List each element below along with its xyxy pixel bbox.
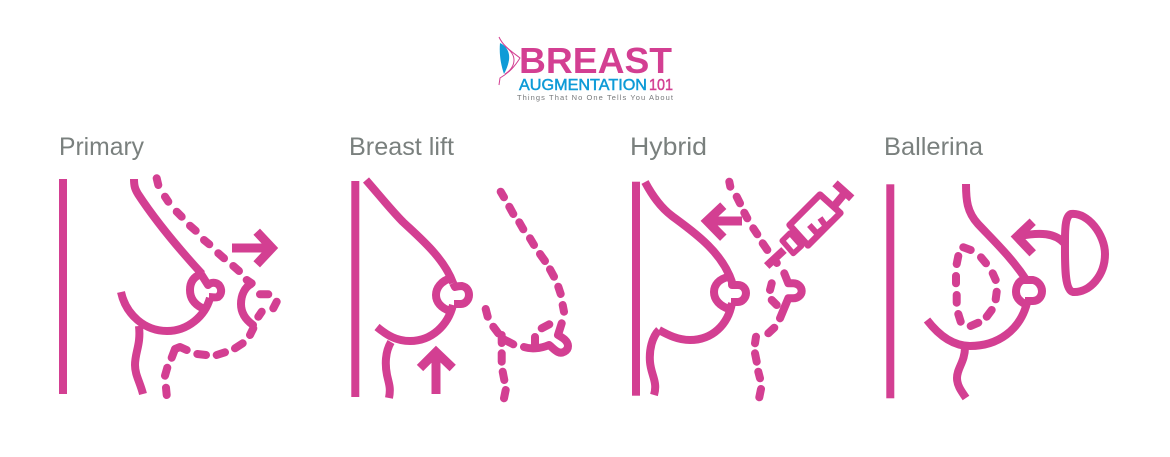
logo word: AUGMENTATION: AUGMENTATION xyxy=(519,77,647,94)
icon: implant xyxy=(1065,214,1105,292)
icon: syringe xyxy=(767,183,852,266)
panel: Breast lift xyxy=(349,133,568,398)
heading: Ballerina: Ballerina xyxy=(884,133,983,161)
body wall bar xyxy=(632,182,640,396)
logo word: BREAST: BREAST xyxy=(519,40,672,81)
solid breast outline xyxy=(366,180,469,398)
panel: Hybrid xyxy=(630,133,852,397)
arrow: right xyxy=(232,232,272,264)
dashed outline xyxy=(729,182,802,397)
heading: Hybrid: Hybrid xyxy=(630,133,707,161)
logo xyxy=(499,37,674,102)
arrow: left xyxy=(707,206,742,238)
logo tagline: Things That No One Tells You About xyxy=(517,93,674,102)
logo icon xyxy=(499,37,520,85)
heading: Breast lift: Breast lift xyxy=(349,133,454,161)
panel: Primary xyxy=(59,133,277,395)
solid breast outline xyxy=(645,182,746,395)
dashed original outline xyxy=(486,192,568,398)
solid breast outline xyxy=(121,179,221,394)
body wall bar xyxy=(59,179,67,394)
heading: Primary: Primary xyxy=(59,133,144,161)
logo number: 101: 101 xyxy=(649,77,673,94)
body wall bar xyxy=(886,184,894,398)
body wall bar xyxy=(351,181,359,397)
panel: Ballerina xyxy=(884,133,1105,398)
dashed augmented outline xyxy=(157,178,277,395)
dashed implant pocket xyxy=(956,247,997,326)
solid breast outline xyxy=(927,184,1042,398)
arrow: curved left xyxy=(1017,222,1064,253)
arrow: up xyxy=(420,352,453,394)
